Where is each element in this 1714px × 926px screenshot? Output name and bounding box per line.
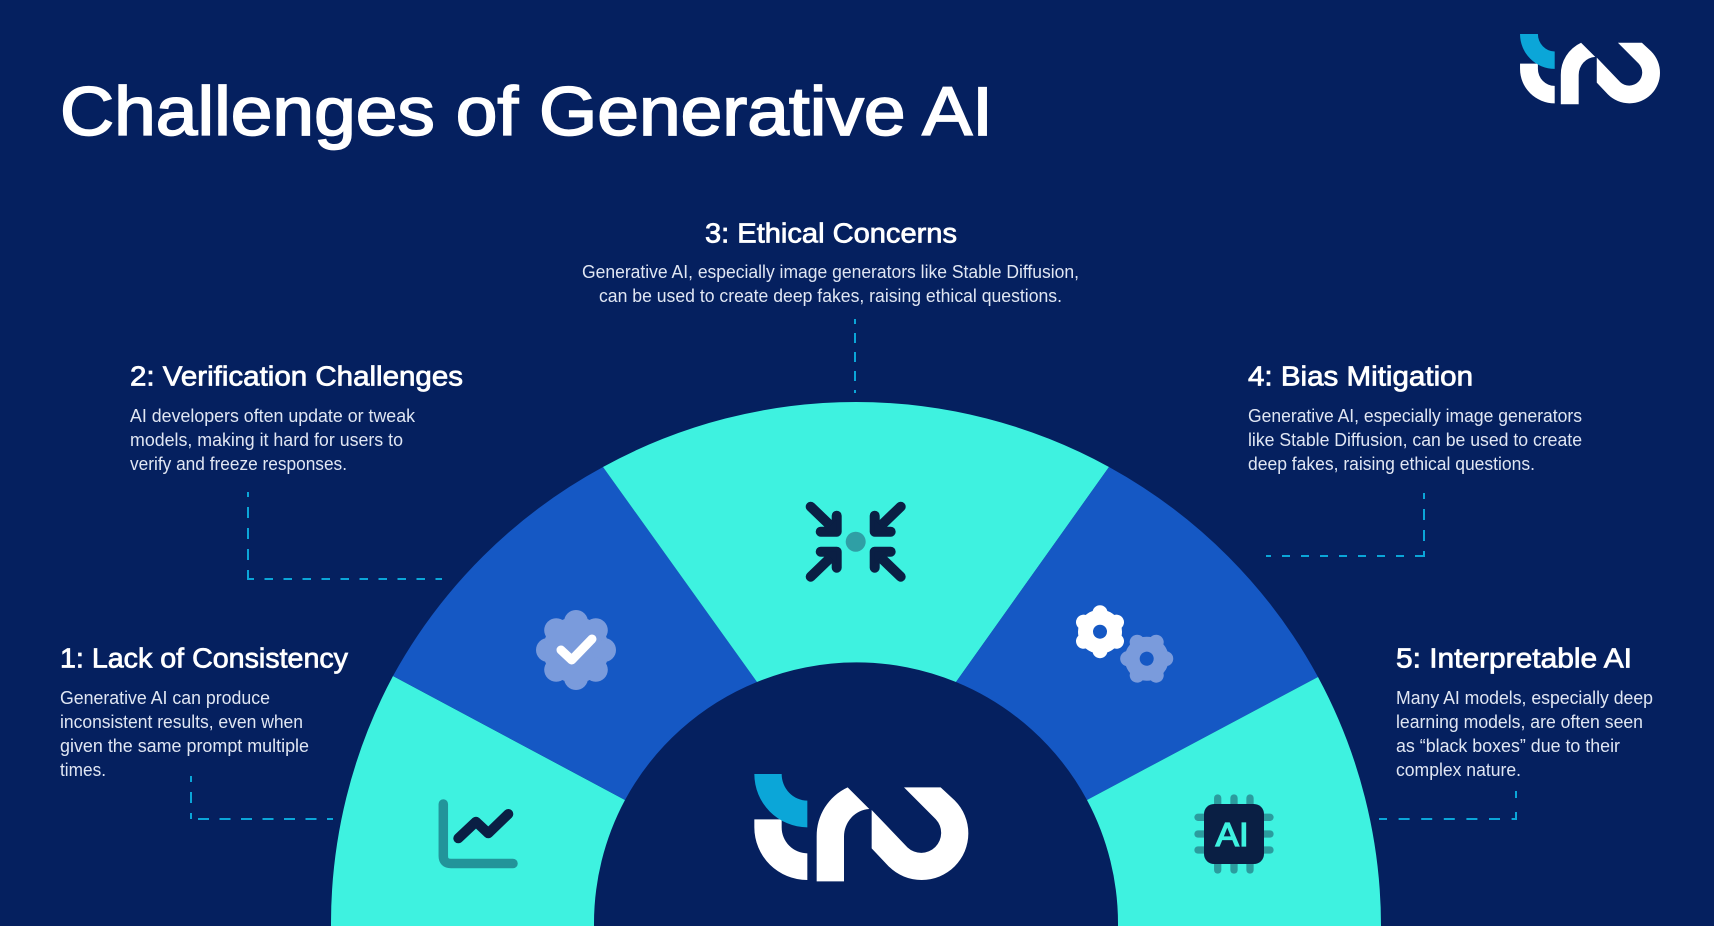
text block: times.: [60, 760, 106, 780]
text block: Many AI models, especially deep: [1396, 688, 1653, 708]
text block: verify and freeze responses.: [130, 454, 347, 474]
semicircle diagram: [331, 402, 1381, 926]
panel: 4 Bias Mitigation: [1248, 360, 1582, 474]
icon: gears: [1078, 610, 1177, 689]
text block: deep fakes, raising ethical questions.: [1248, 454, 1535, 474]
icon: AI chip: [1198, 798, 1270, 870]
icon: verified badge: [536, 610, 616, 690]
panel: 1 Lack of Consistency: [60, 642, 348, 780]
icon: line chart: [443, 804, 513, 864]
text block: [1396, 688, 1653, 780]
connector: item 5: [1379, 791, 1517, 820]
text block: given the same prompt multiple: [60, 736, 309, 756]
text block: Generative AI can produce: [60, 688, 270, 708]
text block: [60, 688, 309, 780]
heading: 5: Interpretable AI: [1396, 642, 1632, 674]
segment 2: blue wedge: [393, 467, 757, 800]
segment 4: blue wedge: [956, 467, 1318, 800]
panel: 3 Ethical Concerns: [582, 218, 1079, 306]
heading: 1: Lack of Consistency: [60, 642, 348, 674]
heading: 3: Ethical Concerns: [705, 218, 957, 248]
logo: top right: [1520, 34, 1660, 104]
segment 5: teal wedge: [1087, 677, 1381, 926]
text block: Generative AI, especially image generators like Stable Diffusion,: [582, 262, 1079, 282]
icon: AI chip: AI: [1216, 816, 1249, 853]
text block: models, making it hard for users to: [130, 430, 403, 450]
connector: item 3: [854, 319, 856, 393]
logo: centre: [754, 774, 968, 881]
text block: can be used to create deep fakes, raising ethical questions.: [599, 286, 1062, 306]
connector: item 4: [1266, 493, 1425, 557]
connector: item 1: [190, 776, 333, 819]
heading: 4: Bias Mitigation: [1248, 360, 1473, 392]
segment 3: teal wedge: [603, 402, 1109, 682]
heading: 2: Verification Challenges: [130, 360, 463, 392]
text block: like Stable Diffusion, can be used to create: [1248, 430, 1582, 450]
connector: item 2: [247, 492, 442, 580]
text block: inconsistent results, even when: [60, 712, 303, 732]
panel: 5 Interpretable AI: [1396, 642, 1653, 780]
text block: learning models, are often seen: [1396, 712, 1643, 732]
text block: AI developers often update or tweak: [130, 406, 416, 426]
text block: [1248, 406, 1582, 474]
text block: Generative AI, especially image generators: [1248, 406, 1582, 426]
text block: [582, 262, 1079, 306]
text block: complex nature.: [1396, 760, 1521, 780]
segment 1: teal wedge: [331, 676, 625, 926]
panel: 2 Verification Challenges: [130, 360, 463, 474]
text block: as “black boxes” due to their: [1396, 736, 1620, 756]
icon: arrows converging on a point: [811, 507, 901, 577]
title: Challenges of Generative AI: [60, 73, 993, 150]
text block: [130, 406, 416, 474]
